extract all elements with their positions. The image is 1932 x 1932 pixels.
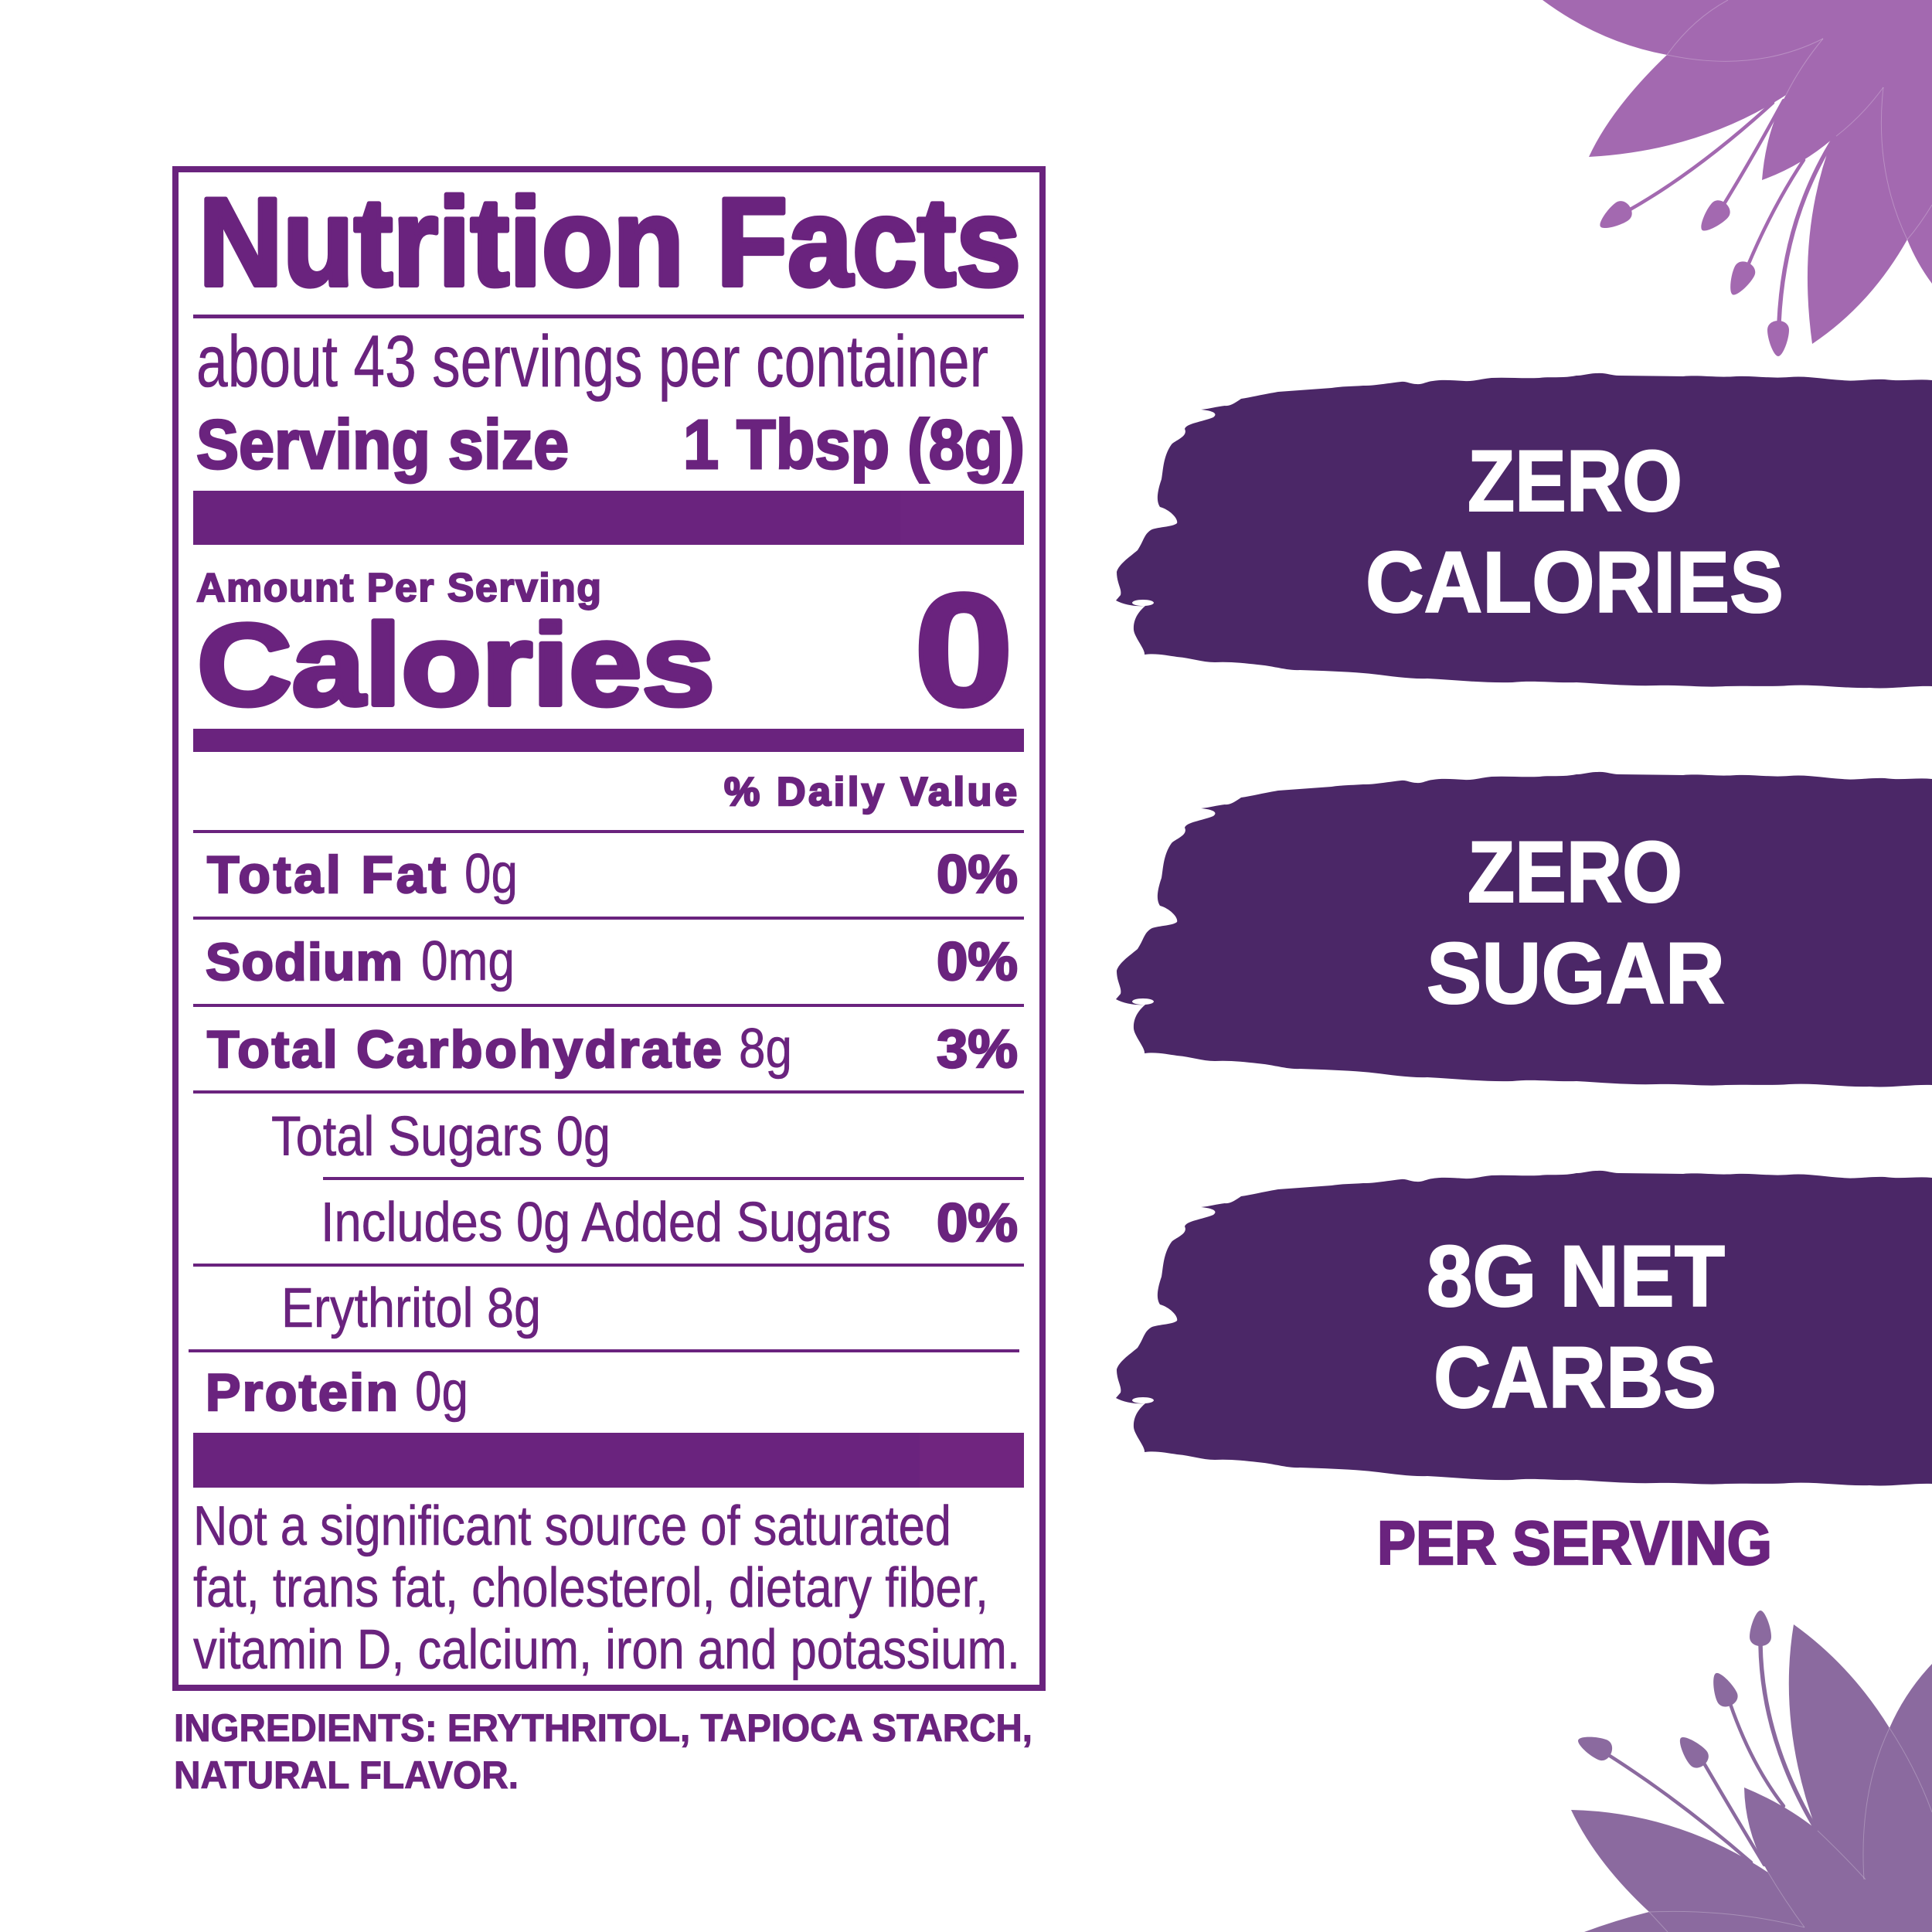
row: protein [206, 1361, 468, 1423]
ingredients: NATURAL FLAVOR. [174, 1753, 519, 1797]
row: added sugars: Includes 0g Added Sugars [321, 1192, 891, 1253]
row: protein: Protein [206, 1363, 398, 1422]
calories label: Calories [197, 600, 715, 730]
row: total fat: 0% [937, 844, 1018, 904]
callout: net carbs: CARBS [1434, 1329, 1716, 1426]
rule [193, 1004, 1024, 1007]
flower stamens [1594, 100, 1835, 356]
thick bar [193, 1433, 1024, 1488]
thick bar [193, 491, 1024, 545]
ingredients: INGREDIENTS: ERYTHRITOL, TAPIOCA STARCH, [174, 1706, 1032, 1750]
row: total carbohydrate: 8g [739, 1018, 792, 1080]
row: total fat: Total Fat [207, 845, 446, 904]
title: Nutrition Facts [199, 172, 1021, 312]
rule [193, 315, 1024, 318]
panel: nutrition facts label [175, 169, 1043, 1688]
row: total carbohydrate: Total Carbohydrate [207, 1020, 722, 1079]
callout: net carbs [1116, 1171, 1932, 1485]
per serving note: PER SERVING [1377, 1509, 1772, 1577]
decoration: top flower [1543, 0, 1932, 356]
rule [193, 1264, 1024, 1267]
serving size value: 1 Tbsp (8g) [683, 406, 1025, 484]
row: sodium: Sodium [206, 933, 403, 992]
rule [193, 1090, 1024, 1094]
flower petals [1571, 1624, 1932, 1932]
servings per container: about 43 servings per container [196, 321, 988, 403]
calories value: 0 [914, 561, 1013, 739]
row: total fat [207, 843, 1018, 905]
daily value heading: % Daily Value [724, 770, 1017, 815]
row: sodium [206, 930, 1018, 992]
panel border [175, 169, 1043, 1688]
medium bar [193, 729, 1024, 752]
amount per serving: Amount Per Serving [196, 566, 601, 611]
petal outlines [1667, 0, 1932, 240]
row: protein: 0g [415, 1361, 468, 1423]
row: total fat: 0g [464, 843, 518, 905]
footnote: Not a significant source of saturated [193, 1495, 951, 1557]
callout: zero calories: CALORIES [1366, 534, 1784, 631]
flower petals [1543, 0, 1932, 344]
rule [193, 917, 1024, 920]
footnote: vitamin D, calcium, iron and potassium. [193, 1619, 1020, 1681]
row: total carbohydrate: 3% [937, 1019, 1018, 1079]
callout: zero calories: ZERO [1468, 433, 1682, 529]
row: total sugars: Total Sugars 0g [271, 1106, 611, 1168]
row: sodium: 0mg [421, 930, 515, 992]
rule [189, 1349, 1019, 1352]
rule [323, 1177, 1024, 1180]
callout: zero sugar [1116, 772, 1932, 1087]
rule [193, 830, 1024, 833]
row: total carbohydrate [207, 1018, 1018, 1080]
serving size label: Serving size [196, 406, 569, 484]
row: sodium: 0% [937, 931, 1018, 992]
petal outlines [1649, 1728, 1932, 1932]
footnote: fat, trans fat, cholesterol, dietary fiber, [193, 1557, 988, 1619]
row: added sugars: 0% [937, 1192, 1018, 1253]
callout: zero sugar: SUGAR [1427, 925, 1725, 1022]
footnote [193, 1495, 1020, 1681]
callout: net carbs: 8G NET [1427, 1228, 1725, 1325]
ingredients [174, 1706, 1032, 1797]
callout: zero sugar: ZERO [1468, 824, 1682, 920]
row: erythritol: Erythritol 8g [281, 1277, 541, 1339]
decoration: bottom flower [1571, 1611, 1932, 1932]
callout: zero calories [1116, 373, 1932, 688]
flower stamens [1574, 1611, 1816, 1865]
